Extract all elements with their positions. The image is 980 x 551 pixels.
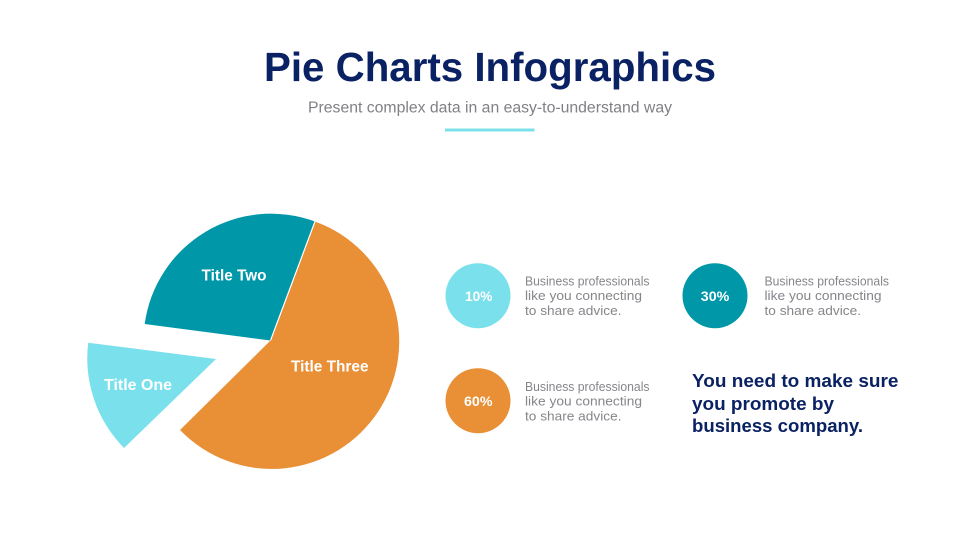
callout text: business company. <box>692 415 863 436</box>
slice: Title One <box>87 343 216 448</box>
badge: 10%: 10% <box>465 288 493 304</box>
description <box>525 379 650 424</box>
description <box>525 274 650 318</box>
pie chart <box>87 214 399 469</box>
slice: Title One: Title One <box>104 377 172 394</box>
accent underline <box>445 128 534 132</box>
legend item: 10% <box>446 263 650 328</box>
description: like you connecting <box>764 288 882 303</box>
badge: 30% <box>682 263 748 328</box>
slice: Title Three: Title Three <box>291 358 369 376</box>
callout text <box>692 370 898 436</box>
legend item: 30% <box>682 263 889 328</box>
description <box>764 274 889 318</box>
description: like you connecting <box>525 288 642 303</box>
description: to share advice. <box>764 303 861 318</box>
description: to share advice. <box>525 408 622 424</box>
callout text: You need to make sure <box>692 370 898 391</box>
badge: 60% <box>446 368 510 433</box>
description: like you connecting <box>525 394 642 409</box>
description: Business professionals <box>525 379 650 394</box>
description: to share advice. <box>525 303 622 318</box>
slice: Title Two <box>145 214 315 340</box>
slice: Title Two: Title Two <box>202 268 267 284</box>
slice: Title Three <box>180 222 399 469</box>
badge: 60%: 60% <box>464 393 493 409</box>
callout text: you promote by <box>692 393 835 414</box>
subtitle: Present complex data in an easy-to-understand way <box>308 100 672 116</box>
description: Business professionals <box>764 274 889 288</box>
legend item: 60% <box>446 368 650 433</box>
badge: 10% <box>446 263 510 328</box>
title: Pie Charts Infographics <box>264 44 716 90</box>
badge: 30%: 30% <box>701 288 730 304</box>
description: Business professionals <box>525 274 650 288</box>
